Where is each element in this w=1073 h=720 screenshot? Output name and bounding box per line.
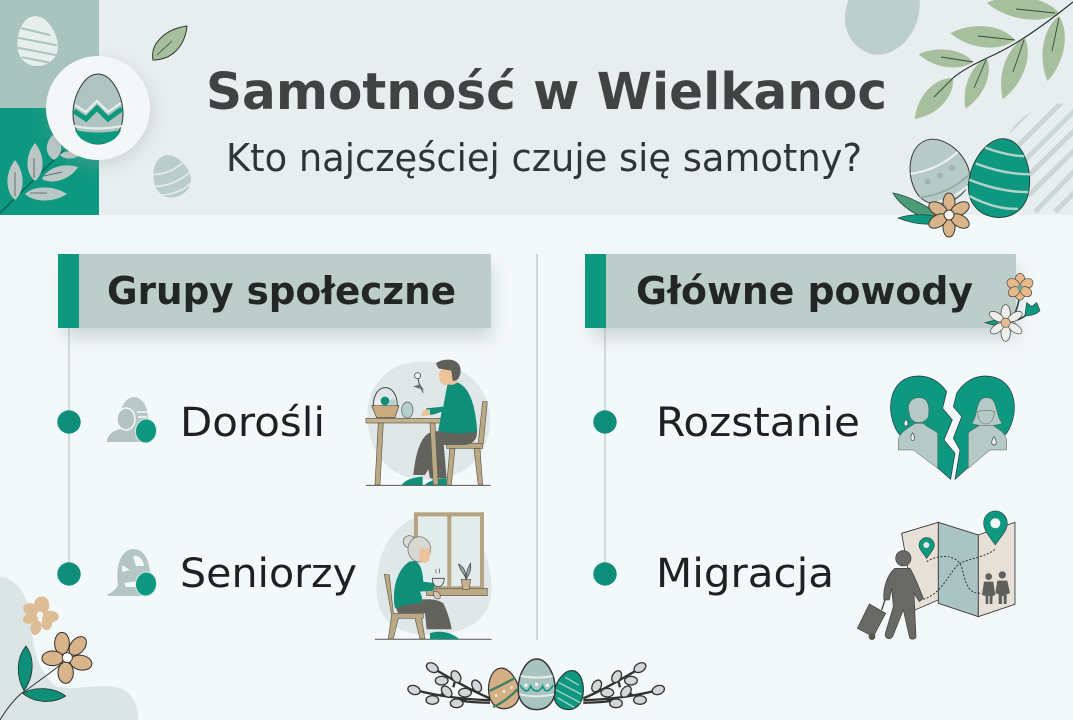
- illustration: migration map and traveller: [857, 511, 1015, 640]
- text: Seniorzy: Seniorzy: [180, 549, 357, 597]
- medallion: egg in white circle: [46, 56, 153, 165]
- timeline left: [57, 328, 81, 586]
- timeline right: [593, 328, 617, 586]
- corner colour blocks: [0, 0, 99, 215]
- center divider: [536, 254, 538, 640]
- panel heading: Grupy społeczne: Grupy społeczne: [107, 269, 456, 313]
- icon: white branch on green block: [0, 134, 80, 213]
- bottom-left blob with flowers: [0, 577, 138, 720]
- icon: senior with egg: [107, 549, 158, 597]
- icon: spring flower with leaves: [893, 193, 972, 237]
- panel heading: Główne powody: Główne powody: [636, 269, 973, 313]
- flower decoration on heading: [985, 273, 1040, 341]
- text: Dorośli: Dorośli: [180, 398, 325, 446]
- olive branch top right: [907, 0, 1073, 126]
- title: Samotność w Wielkanoc: [206, 63, 887, 122]
- text: Migracja: Migracja: [656, 549, 834, 597]
- striped circle: [1008, 104, 1073, 213]
- illustration: senior woman at window: [375, 514, 492, 639]
- icon: grey striped egg: [146, 149, 196, 203]
- illustration: man at Easter table: [366, 360, 491, 485]
- panel heading: Główne powody: [585, 254, 1016, 338]
- icon: grey dotted egg: [898, 129, 978, 213]
- bottom wreath: eggs and catkins: [407, 659, 666, 712]
- icon: adult with egg: [107, 397, 158, 444]
- illustration: broken heart couple: [891, 376, 1014, 479]
- icon: striped pale egg: [14, 13, 60, 69]
- icon: green striped egg: [964, 135, 1036, 221]
- leaf top left: [153, 26, 187, 60]
- header band: [0, 0, 1073, 215]
- panel heading: Grupy społeczne: [58, 254, 491, 338]
- subtitle: Kto najczęściej czuje się samotny?: [226, 136, 862, 181]
- big egg blob top right: [845, 0, 920, 55]
- text: Rozstanie: Rozstanie: [656, 398, 860, 446]
